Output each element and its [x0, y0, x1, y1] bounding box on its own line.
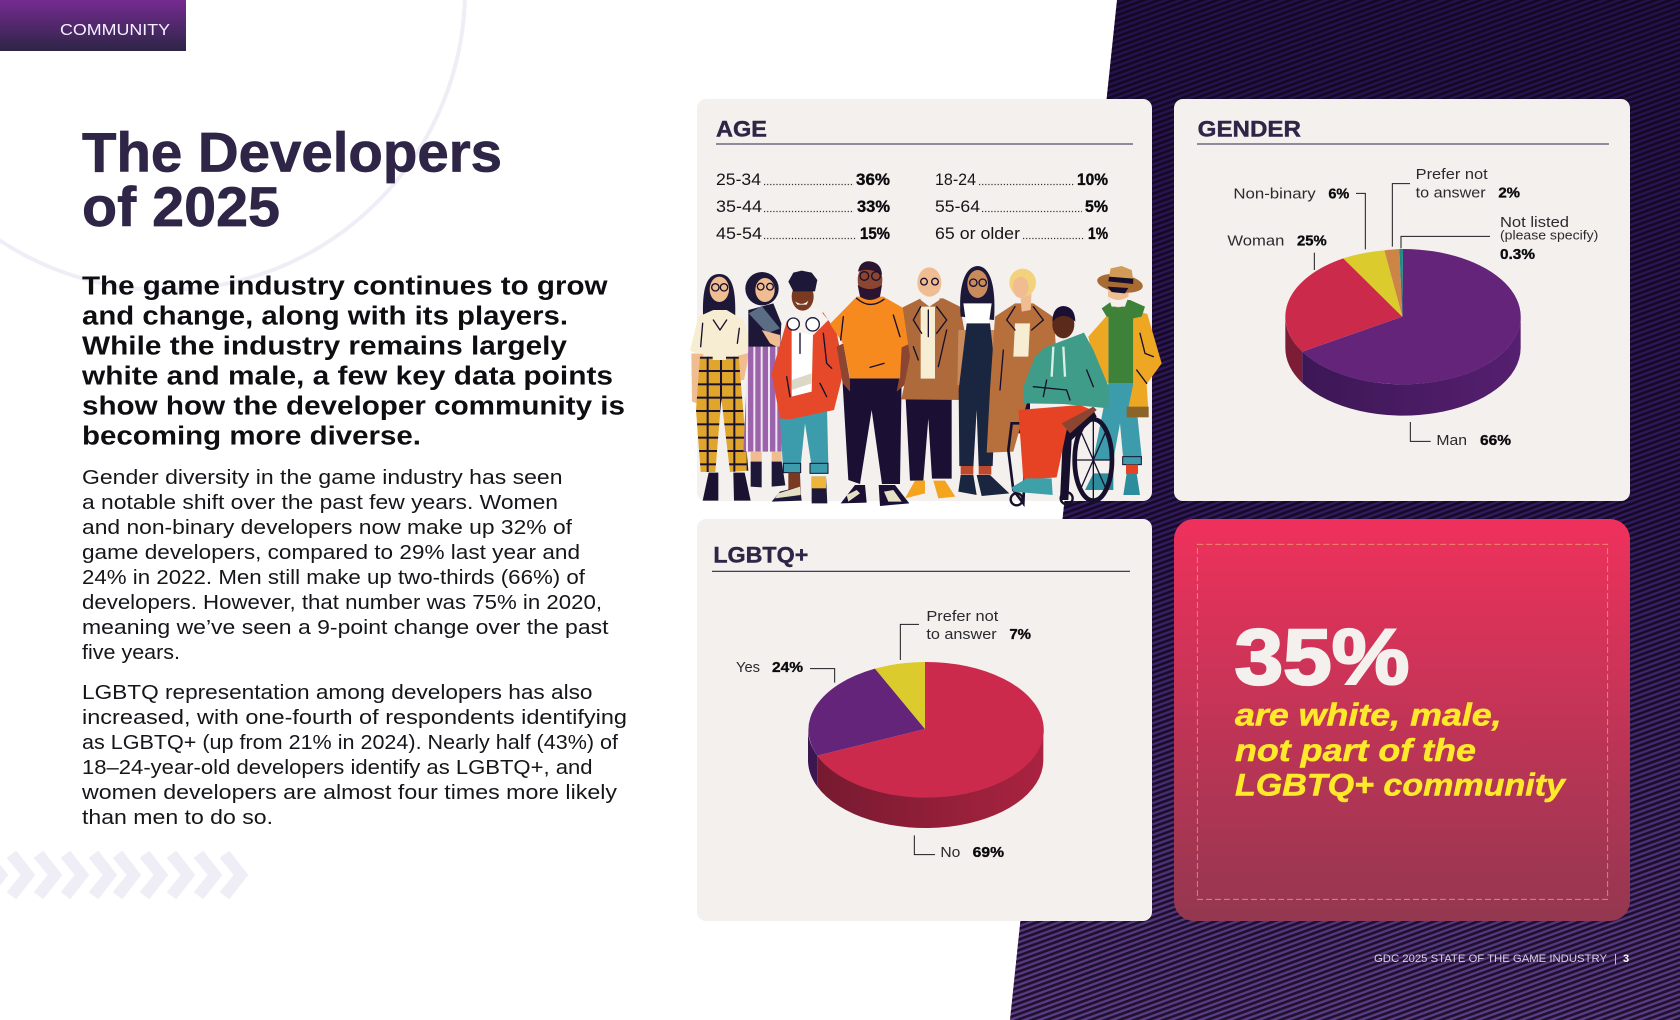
section tab: community: COMMUNITY	[60, 22, 170, 39]
label: prefer not to answer: Prefer not	[1416, 167, 1488, 183]
age table: 15%	[860, 225, 890, 243]
person: red jacket	[772, 271, 844, 503]
person: long coat	[987, 269, 1057, 453]
body paragraph: LGBTQ representation	[81, 681, 627, 829]
label: man: 66%	[1480, 433, 1511, 449]
body paragraph: gender diversity	[82, 466, 609, 664]
label: prefer not to answer: 2%	[1498, 185, 1520, 201]
big number: 35%	[1235, 613, 1409, 701]
person: plaid trousers	[690, 274, 753, 501]
body paragraph: LGBTQ representation: increased, with one-fourth of respondents identifying	[82, 706, 627, 729]
body paragraph: gender diversity: and non-binary developers now make up 32% of	[82, 516, 572, 539]
callout panel: 35%	[1174, 519, 1630, 921]
heading: lgbtq+: LGBTQ+	[713, 543, 808, 568]
body paragraph: gender diversity: a notable shift over the past few years. Women	[82, 491, 558, 514]
3d pie chart: gender	[1285, 249, 1521, 416]
title: of 2025	[82, 175, 280, 238]
label: non-binary: Non-binary	[1233, 186, 1317, 202]
lgbtq chart area	[712, 543, 1130, 861]
label: yes: 24%	[772, 660, 803, 676]
label: prefer not to answer: to answer	[926, 627, 997, 643]
footer: GDC 2025 STATE OF THE GAME INDUSTRY	[1374, 953, 1608, 965]
age table: 35-44	[716, 198, 762, 216]
callout text: are white, male,	[1235, 697, 1502, 733]
label: not listed: Not listed	[1500, 215, 1569, 231]
age table: 10%	[1077, 171, 1108, 189]
heading: gender: GENDER	[1198, 117, 1301, 142]
body paragraph: gender diversity: meaning we’ve seen a 9-point change over the past	[82, 616, 609, 639]
person: brown blazer	[901, 267, 969, 498]
title	[82, 120, 502, 238]
body paragraph: gender diversity: Gender diversity in the game industry has seen	[82, 466, 562, 489]
label: not listed	[1401, 215, 1598, 263]
label: prefer not to answer: to answer	[1416, 185, 1486, 201]
panel: lgbtq+	[697, 519, 1152, 921]
lead paragraph: white and male, a few key data points	[81, 363, 613, 391]
label: not listed: (please specify)	[1500, 228, 1598, 242]
title: The Developers	[82, 120, 502, 184]
decorative chevrons	[0, 852, 247, 898]
heading: age: AGE	[716, 117, 767, 142]
gender chart area	[1197, 117, 1609, 449]
lead paragraph: While the industry remains largely	[82, 333, 568, 361]
body paragraph: gender diversity: developers. However, that number was 75% in 2020,	[82, 591, 602, 614]
age table: 55-64	[935, 198, 980, 216]
label: non-binary: 6%	[1328, 186, 1350, 202]
footer: 3	[1623, 953, 1629, 965]
label: woman: 25%	[1297, 233, 1327, 249]
label: yes: Yes	[736, 660, 760, 676]
lead paragraph: becoming more diverse.	[82, 423, 421, 451]
label: man: Man	[1436, 433, 1467, 449]
body paragraph: LGBTQ representation: women developers are almost four times more likely	[81, 781, 618, 804]
age table: 45-54	[716, 225, 762, 243]
age table: 1%	[1088, 225, 1108, 243]
callout text: not part of the	[1235, 732, 1476, 768]
age table: 65 or older	[935, 225, 1021, 243]
footer: |	[1614, 953, 1617, 965]
body paragraph: LGBTQ representation: than men to do so.	[82, 806, 273, 829]
label: no	[914, 835, 1004, 861]
person: hat and yellow coat	[1085, 266, 1162, 495]
person: wheelchair user	[1008, 306, 1112, 505]
lead paragraph: and change, along with its players.	[82, 303, 568, 331]
label: no: No	[940, 845, 960, 861]
panel: gender	[1174, 99, 1630, 501]
label: woman	[1227, 233, 1327, 270]
callout text: LGBTQ+ community	[1235, 767, 1566, 803]
lead paragraph: The game industry continues to grow	[82, 273, 608, 301]
background: dark striped diagonal panel	[1010, 0, 1680, 1020]
person: orange t-shirt	[830, 261, 917, 506]
illustration: group of developers	[690, 261, 1162, 506]
body paragraph: LGBTQ representation: 18–24-year-old developers identify as LGBTQ+, and	[82, 756, 592, 779]
age table: 33%	[857, 198, 890, 216]
label: non-binary	[1233, 186, 1365, 249]
label: prefer not to answer: 7%	[1009, 627, 1031, 643]
label: prefer not to answer	[900, 609, 1031, 660]
person: overalls	[957, 266, 1009, 496]
lead paragraph	[81, 273, 625, 451]
age table: 5%	[1085, 198, 1108, 216]
panel: age	[697, 99, 1152, 501]
label: prefer not to answer: Prefer not	[926, 609, 998, 625]
label: yes	[736, 660, 835, 683]
lead paragraph: show how the developer community is	[82, 393, 625, 421]
body paragraph: gender diversity: five years.	[82, 641, 180, 664]
age table: 18-24	[935, 171, 976, 189]
callout text	[1235, 697, 1566, 803]
age table: 36%	[856, 171, 890, 189]
body paragraph: LGBTQ representation: LGBTQ representation among developers has also	[82, 681, 592, 704]
age table: 25-34	[716, 171, 761, 189]
label: no: 69%	[973, 845, 1004, 861]
body paragraph: LGBTQ representation: as LGBTQ+ (up from 21% in 2024). Nearly half (43%) of	[82, 731, 618, 754]
person: striped skirt	[743, 272, 785, 487]
label: man	[1410, 422, 1511, 449]
label: woman: Woman	[1227, 233, 1284, 249]
label: prefer not to answer	[1392, 167, 1520, 247]
label: not listed: 0.3%	[1500, 247, 1535, 263]
decorative circle arc	[0, 0, 465, 290]
3d pie chart: lgbtq	[808, 662, 1044, 828]
age table	[716, 171, 1108, 243]
body paragraph: gender diversity: game developers, compared to 29% last year and	[82, 541, 580, 564]
section tab: community	[0, 0, 186, 51]
body paragraph: gender diversity: 24% in 2022. Men still make up two-thirds (66%) of	[82, 566, 585, 589]
